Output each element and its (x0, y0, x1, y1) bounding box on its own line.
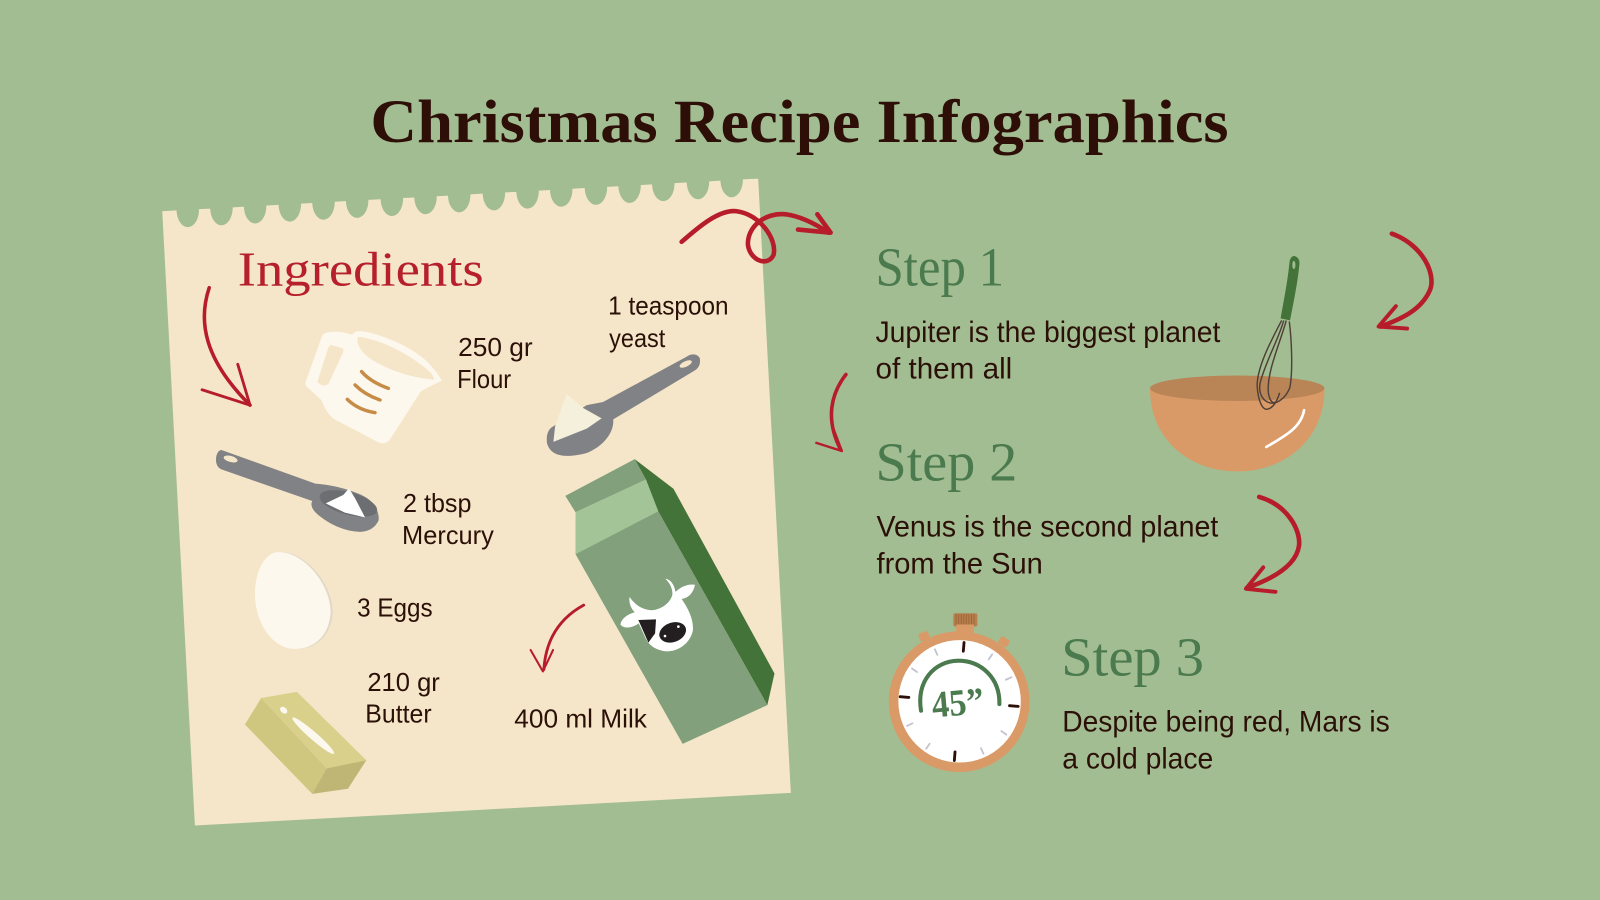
arrow: note to step 1 (682, 211, 831, 261)
text: yeast amount (608, 292, 729, 353)
text: step 2 description (877, 511, 1218, 580)
arrow: bowl pointer (1379, 234, 1431, 329)
text: mercury amount: 2 tbsp (403, 490, 471, 518)
text: step 3 description: a cold place (1062, 742, 1213, 775)
icon: stopwatch 45 seconds: 45” (930, 680, 986, 726)
heading: step 1: Step 1 (876, 237, 1004, 298)
icon: measuring cup (305, 331, 442, 443)
icon: egg (255, 552, 333, 649)
text: milk amount: 400 ml Milk (514, 706, 647, 734)
text: step 1 description: of them all (876, 353, 1012, 386)
text: butter amount (365, 669, 440, 728)
text: step 3 description: Despite being red, Mars is (1062, 706, 1390, 739)
arrow: ingredients pointer (202, 288, 250, 405)
text: yeast amount: 1 teaspoon (608, 292, 729, 320)
heading: step 3: Step 3 (1061, 627, 1204, 688)
text: eggs amount: 3 Eggs (357, 594, 433, 622)
icon: teaspoon with yeast (547, 354, 700, 456)
icon: milk carton (565, 459, 774, 744)
heading: ingredients: Ingredients (238, 242, 484, 297)
text: flour amount: Flour (457, 366, 512, 394)
title: Christmas Recipe Infographics (370, 88, 1229, 156)
text: yeast amount: yeast (609, 325, 665, 353)
text: flour amount: 250 gr (458, 334, 533, 362)
text: butter amount: 210 gr (367, 669, 440, 697)
text: butter amount: Butter (365, 700, 432, 728)
arrow: milk pointer (531, 605, 584, 671)
heading: step 2: Step 2 (876, 432, 1017, 493)
text: step 1 description (876, 316, 1220, 386)
text: step 2 description: from the Sun (877, 547, 1043, 580)
text: flour amount (457, 334, 533, 394)
icon: tablespoon with powder (216, 450, 380, 532)
icon: mixing bowl with whisk (1150, 256, 1324, 471)
text: mercury amount (402, 490, 494, 550)
icon: butter block (245, 692, 366, 794)
text: mercury amount: Mercury (402, 522, 494, 550)
text: step 1 description: Jupiter is the biggest planet (876, 316, 1220, 349)
panel: ingredients paper note (162, 179, 1431, 826)
icon: cow face (620, 579, 695, 651)
text: step 2 description: Venus is the second planet (877, 511, 1218, 544)
arrow: step 2 to step 3 (1246, 497, 1299, 592)
arrow: step 1 to step 2 (816, 374, 846, 451)
icon: stopwatch 45 seconds (889, 613, 1030, 772)
text: step 3 description (1062, 706, 1390, 775)
